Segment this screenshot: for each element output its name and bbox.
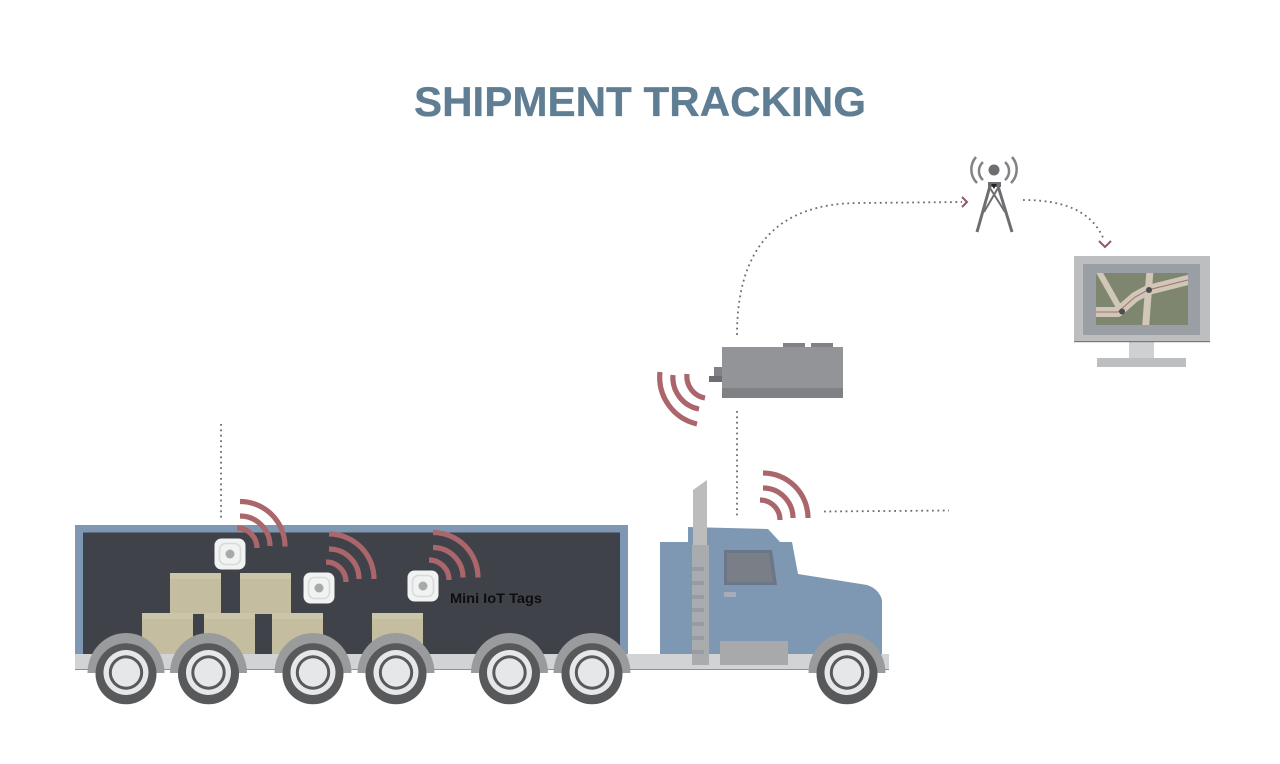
signal waves: truck [760,473,808,520]
signal waves: tag 1 [237,502,285,548]
chassis deck [75,654,889,670]
signal waves: tag 3 [429,532,478,580]
dotted arrow: tower to monitor [1023,200,1111,247]
signal waves: tag 2 [326,534,374,582]
dotted arrow: tracker to tower [737,197,967,335]
map [1096,273,1188,325]
title: SHIPMENT TRACKING [414,78,866,125]
cargo boxes [142,573,423,654]
cab window [724,550,777,585]
truck trailer [75,525,628,655]
exhaust stack and steps [692,480,709,665]
monitor bezel [1074,256,1210,342]
dotted line: tags to air [220,424,222,518]
icon: gateway tracker device [709,343,843,398]
door handle [724,592,736,597]
truck cab [660,527,882,655]
signal waves: tracker [660,372,705,424]
monitor stand [1129,342,1154,359]
label: mini IoT tags: Mini IoT Tags [450,590,542,606]
dotted line: truck to right [824,510,949,512]
trailer interior [83,532,620,654]
icon: monitor with map [1074,256,1210,367]
fuel tank [720,641,788,665]
cab body [660,527,882,655]
icon: mini IoT tags [214,538,438,604]
icon: cell tower [971,157,1017,232]
wheels [88,633,886,704]
dotted line: truck to tracker [736,411,738,519]
trailer frame [75,525,628,655]
